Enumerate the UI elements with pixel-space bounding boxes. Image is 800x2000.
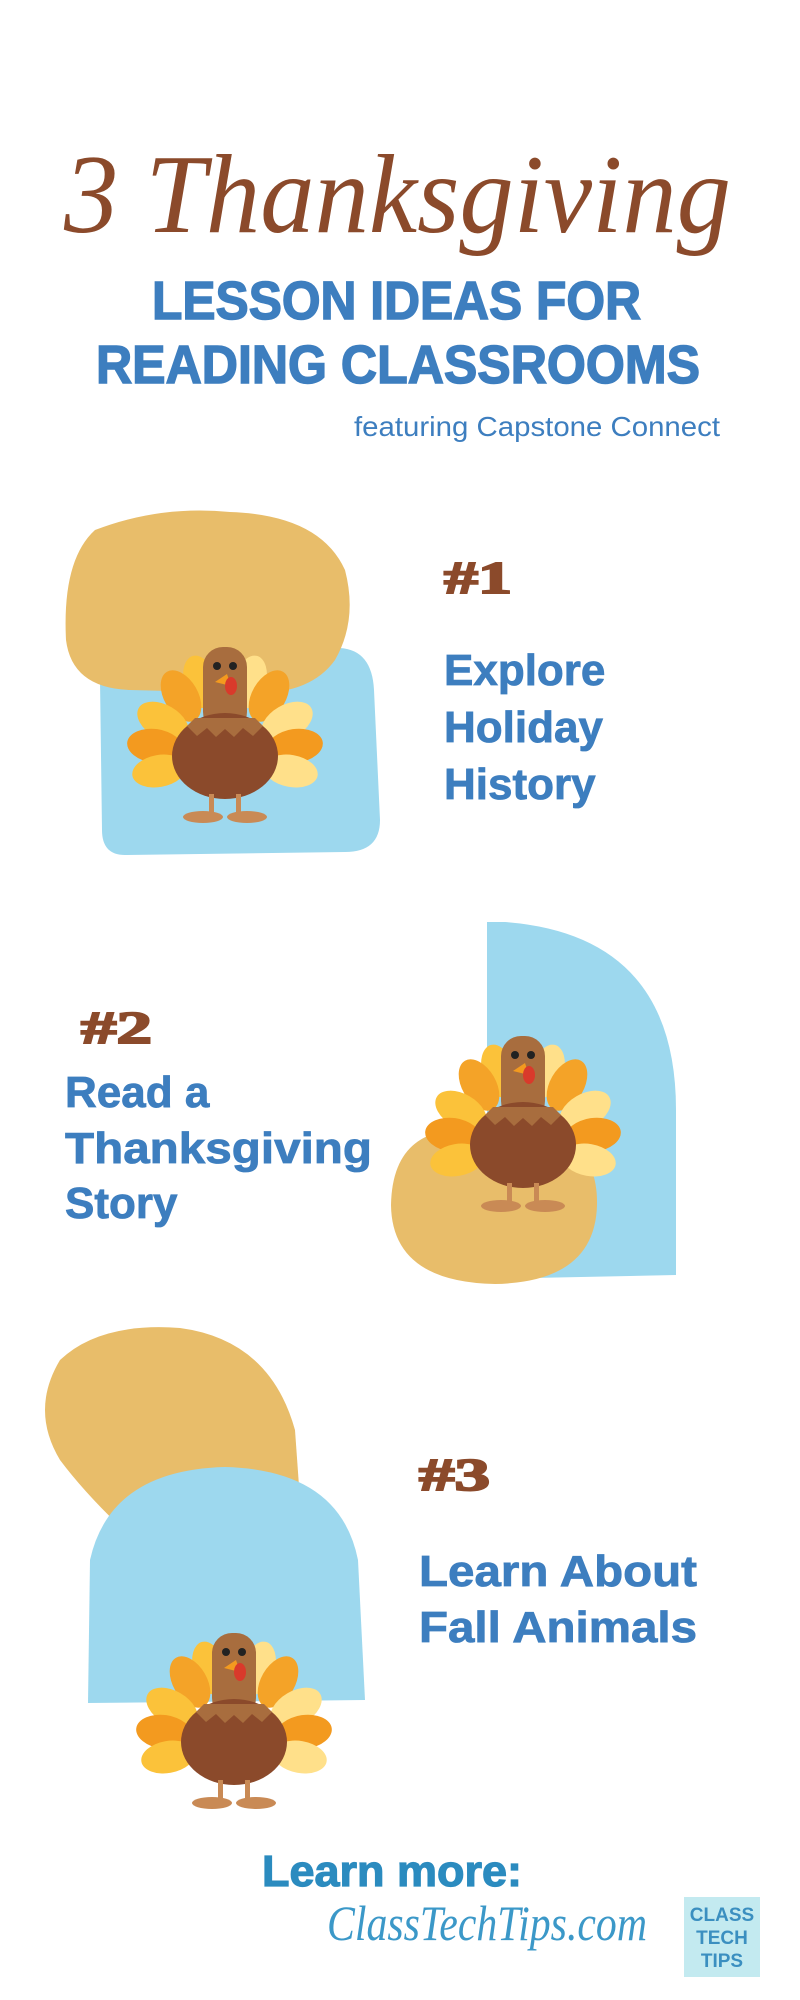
- subtitle heading: READING CLASSROOMS: [96, 335, 700, 395]
- panel 2: [65, 922, 676, 1284]
- icon: turkey 2: [423, 1036, 623, 1212]
- panel 3 text: [419, 1547, 697, 1652]
- panel 3: [45, 1327, 697, 1809]
- title: 3 Thanksgiving: [63, 133, 731, 257]
- footer learn more: Learn more:: [262, 1847, 522, 1896]
- logo: TIPS: [701, 1951, 743, 1972]
- panel 1: [66, 510, 605, 855]
- footer website: ClassTechTips.com: [327, 1895, 647, 1951]
- panel 2 text: Story: [65, 1179, 178, 1228]
- panel 1 text: Explore: [444, 646, 605, 695]
- panel 3 text: Fall Animals: [419, 1603, 697, 1652]
- subtitle heading: [96, 271, 700, 395]
- panel 3 text: Learn About: [419, 1547, 697, 1596]
- logo: TECH: [696, 1928, 748, 1949]
- panel 1 text: [444, 646, 605, 809]
- panel 1 text: History: [444, 760, 596, 809]
- panel 1 gold blob: [66, 510, 350, 693]
- panel 1 number: #1: [444, 552, 512, 603]
- panel 2 text: Read a: [65, 1068, 210, 1117]
- panel 1 blue blob: [100, 648, 380, 855]
- subtitle heading: LESSON IDEAS FOR: [152, 271, 641, 331]
- panel 3 number: #3: [419, 1449, 490, 1500]
- panel 3 gold blob: [45, 1327, 300, 1545]
- featuring text: featuring Capstone Connect: [354, 411, 720, 442]
- panel 2 gold circle: [391, 1128, 597, 1284]
- logo: CLASS: [690, 1905, 754, 1926]
- icon: turkey 3: [134, 1633, 334, 1809]
- logo: [684, 1897, 760, 1977]
- panel 2 text: Thanksgiving: [65, 1124, 372, 1173]
- panel 2 number: #2: [81, 1002, 152, 1053]
- panel 2 blue shape: [487, 922, 676, 1279]
- panel 3 blue dome: [88, 1467, 365, 1703]
- icon: turkey 1: [125, 647, 325, 823]
- panel 2 text: [65, 1068, 372, 1228]
- panel 1 text: Holiday: [444, 703, 603, 752]
